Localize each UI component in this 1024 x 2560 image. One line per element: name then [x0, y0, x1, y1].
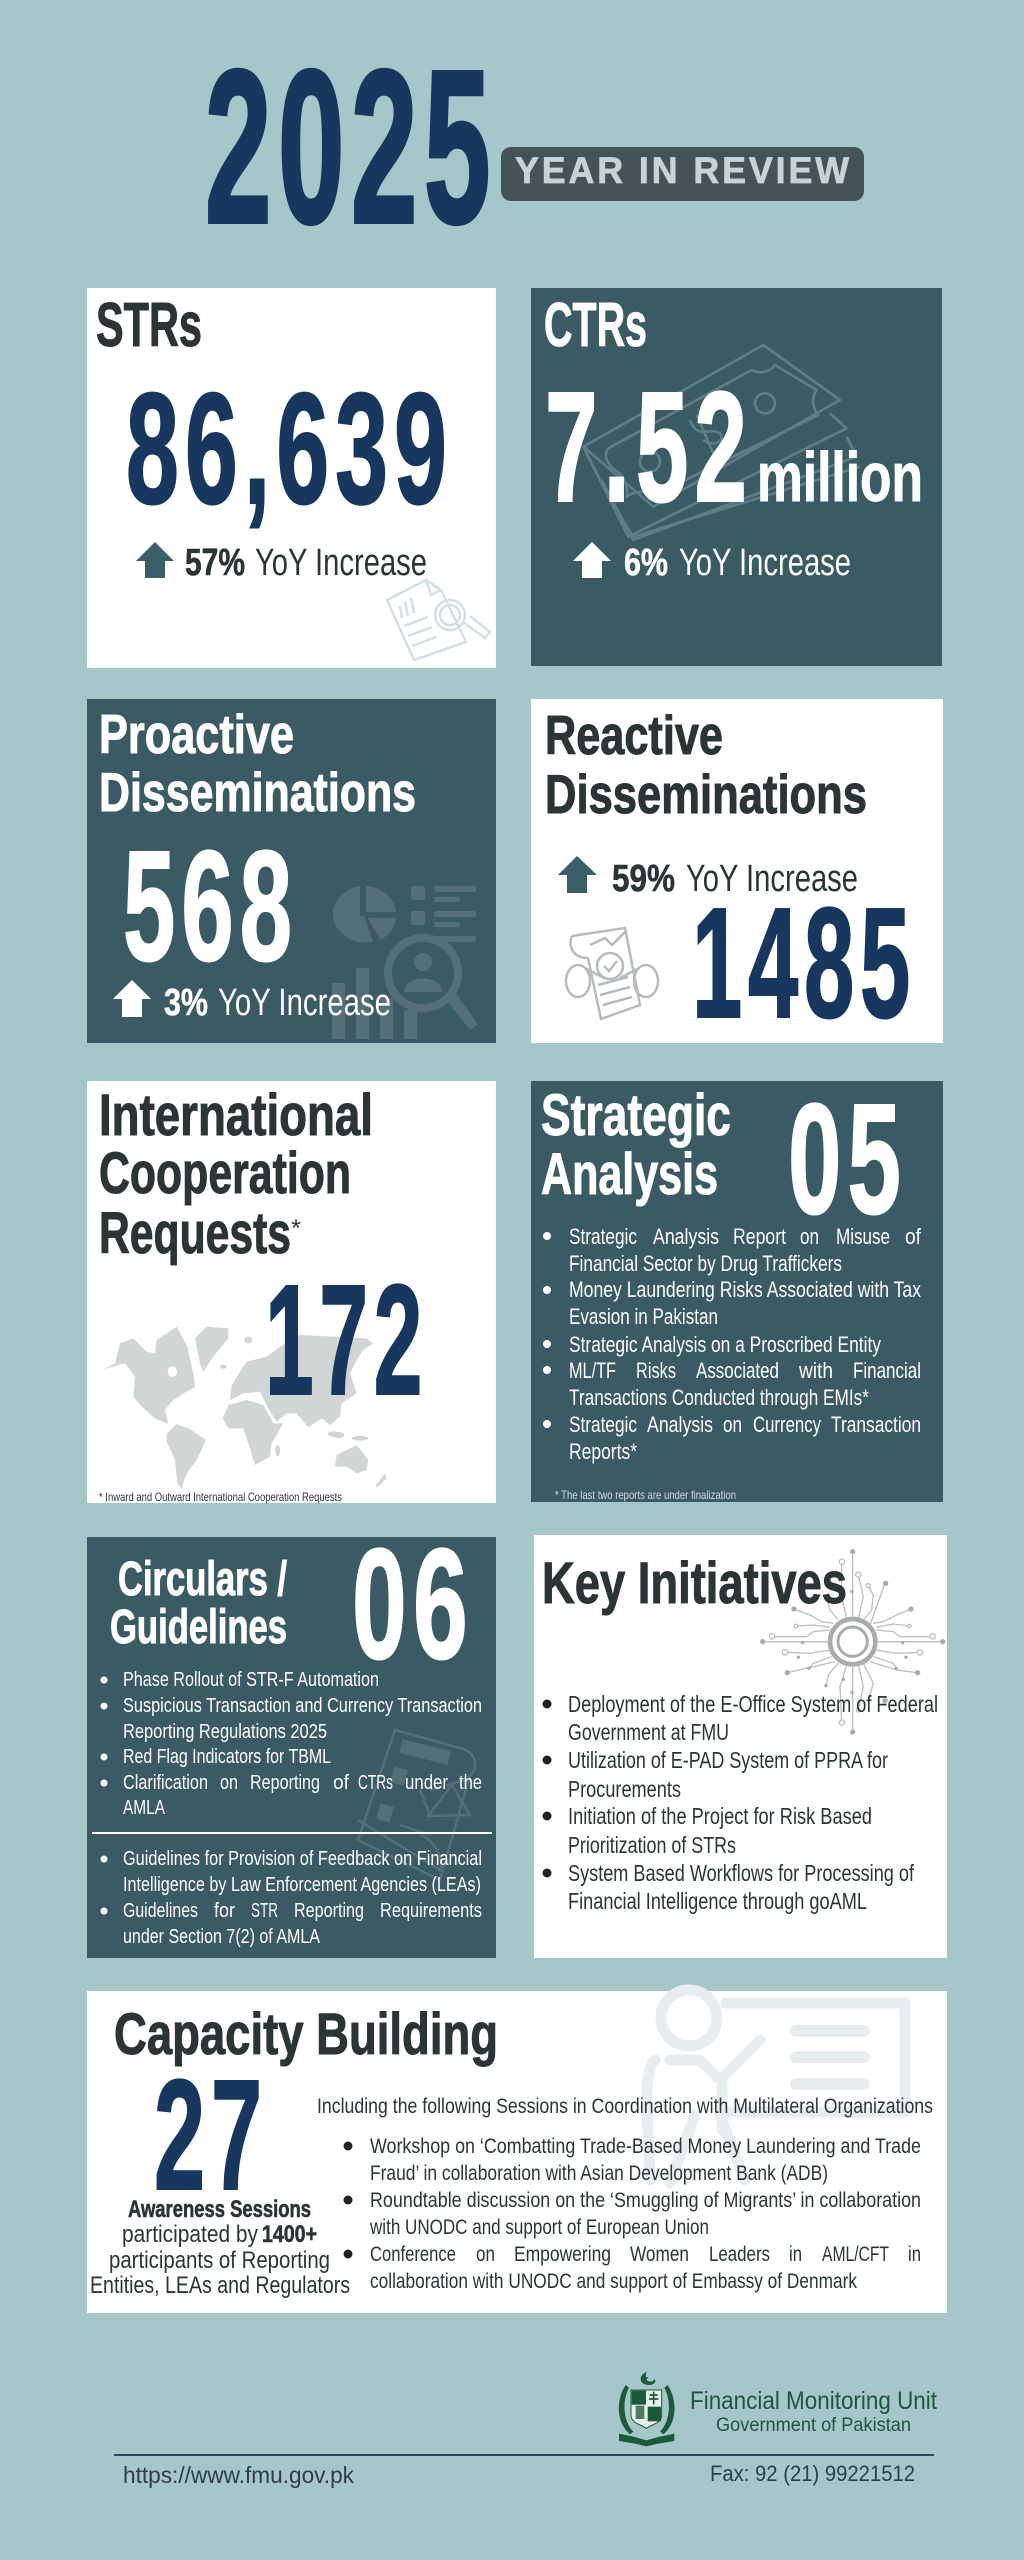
heading: Circulars / Guidelines: [110, 1553, 287, 1654]
YoY increase: [612, 858, 858, 900]
heading: Proactive Disseminations: Disseminations: [99, 761, 416, 823]
list: guidelines: under Section 7(2) of AMLA: [123, 1926, 321, 1948]
YoY increase: [164, 982, 391, 1024]
heading: Proactive Disseminations: Proactive: [99, 703, 294, 765]
list: strategic reports: ML/TF: [569, 1358, 616, 1383]
YoY increase: [185, 542, 427, 584]
heading: Strategic Analysis: Analysis: [541, 1142, 718, 1207]
list: strategic reports: Evasion in Pakistan: [569, 1304, 718, 1329]
heading: Circulars / Guidelines: Guidelines: [110, 1601, 287, 1654]
heading: International Cooperation Requests: *: [291, 1215, 301, 1242]
list: circulars: [100, 1669, 482, 1819]
heading: CTRs: CTRs: [544, 291, 647, 360]
list: strategic reports: Strategic: [569, 1224, 637, 1249]
number: 568: 568: [123, 819, 298, 994]
awareness sessions text: Entities, LEAs and Regulators: [90, 2272, 350, 2299]
list: strategic reports: Analysis: [653, 1224, 719, 1249]
list: strategic reports: [543, 1224, 922, 1464]
list: guidelines: Requirements: [380, 1900, 482, 1922]
list: strategic reports: Misuse: [836, 1224, 890, 1249]
organisation name: Financial Monitoring Unit: [690, 2387, 937, 2415]
list: sessions: with UNODC and support of European Union: [369, 2216, 709, 2239]
fax: Fax: 92 (21) 99221512: [710, 2461, 915, 2486]
panel: Circulars / Guidelines: [87, 1517, 496, 1958]
list: initiatives: Procurements: [568, 1776, 681, 1802]
list: sessions: Empowering: [514, 2243, 611, 2266]
list: sessions: Women: [630, 2243, 689, 2266]
number: 7.52 million: million: [757, 438, 923, 516]
icon: document with magnifier: [387, 580, 490, 660]
footnote: * Inward and Outward International Cooperation Requests: [99, 1490, 342, 1504]
heading: International Cooperation Requests: Requests: [99, 1201, 291, 1266]
list: strategic reports: Transaction: [831, 1412, 921, 1437]
list: strategic reports: Money Laundering Risks Associated with Tax: [569, 1277, 921, 1302]
list: strategic reports: of: [905, 1224, 922, 1249]
list: strategic reports: on: [800, 1224, 819, 1249]
YoY increase: 3%: [164, 982, 208, 1024]
list: strategic reports: Analysis: [647, 1412, 713, 1437]
heading: Proactive Disseminations: [99, 703, 416, 823]
YoY increase: [624, 542, 851, 584]
icon: handcuffs and report: [566, 928, 658, 1019]
list: strategic reports: Currency: [753, 1412, 821, 1437]
list: circulars: Clarification: [123, 1772, 208, 1794]
list: circulars: of: [333, 1772, 349, 1794]
list: circulars: Phase Rollout of STR-F Automation: [123, 1669, 379, 1691]
list: sessions: in: [789, 2243, 802, 2266]
list: sessions: Fraud’ in collaboration with Asian Development Bank (ADB): [370, 2162, 828, 2185]
list: circulars: on: [220, 1772, 238, 1794]
list: circulars: the: [459, 1772, 482, 1794]
list: strategic reports: Associated: [696, 1358, 779, 1383]
list: circulars: Suspicious Transaction and Currency Transaction: [123, 1695, 482, 1717]
awareness sessions text: participated by: [122, 2221, 258, 2248]
awareness sessions text: participants of Reporting: [109, 2247, 330, 2274]
list: guidelines: Reporting: [294, 1900, 364, 1922]
list: initiatives: [542, 1691, 938, 1914]
panel: Reactive Disseminations: [531, 699, 943, 1051]
heading: Reactive Disseminations: [545, 704, 867, 825]
YoY increase: YoY Increase: [218, 982, 391, 1024]
icon: up arrow: [558, 856, 597, 893]
list: sessions: in: [908, 2243, 921, 2266]
heading: Circulars / Guidelines: Circulars /: [118, 1553, 287, 1606]
title: [205, 26, 864, 269]
panel: CTRs: [531, 288, 942, 666]
list: initiatives: Financial Intelligence through goAML: [568, 1888, 867, 1914]
YoY increase: YoY Increase: [679, 542, 851, 584]
YoY increase: 57%: [185, 542, 245, 584]
list: sessions: collaboration with UNODC and support of Embassy of Denmark: [370, 2270, 857, 2293]
icon: analytics watermark: [332, 886, 478, 1039]
icon: world map: [103, 1327, 387, 1488]
icon: circuit: [760, 1549, 945, 1735]
number: 06: 06: [352, 1517, 474, 1692]
list: initiatives: Prioritization of STRs: [568, 1832, 736, 1858]
heading: Capacity Building: Capacity Building: [114, 2002, 498, 2067]
YoY increase: 6%: [624, 542, 668, 584]
list: guidelines: Guidelines: [123, 1900, 198, 1922]
heading: Key Initiatives: Key Initiatives: [542, 1551, 847, 1616]
panel: Strategic Analysis: [531, 1072, 943, 1502]
list: guidelines: Guidelines for Provision of Feedback on Financial: [123, 1848, 482, 1870]
list: initiatives: Initiation of the Project for Risk Based: [568, 1803, 872, 1829]
list: guidelines: for: [214, 1900, 235, 1922]
footer: [114, 2372, 937, 2488]
list: initiatives: Deployment of the E-Office System of Federal: [568, 1691, 938, 1717]
list: strategic reports: Report: [733, 1224, 786, 1249]
heading: Reactive Disseminations: Reactive: [545, 704, 723, 766]
list: sessions: AML/CFT: [822, 2243, 889, 2266]
heading: Strategic Analysis: [541, 1083, 731, 1207]
heading: STRs: STRs: [96, 291, 202, 360]
awareness sessions text: 1400+: [262, 2221, 317, 2248]
number: 7.52 million: 7.52: [545, 360, 753, 535]
number: 05: 05: [788, 1072, 907, 1247]
icon: scroll with warning: [358, 1730, 475, 1880]
YoY increase: YoY Increase: [686, 858, 858, 900]
list: circulars: Red Flag Indicators for TBML: [123, 1746, 331, 1768]
number: 172: 172: [265, 1253, 428, 1428]
list: circulars: under: [405, 1772, 448, 1794]
subtitle badge: YEAR IN REVIEW: [515, 150, 852, 191]
list: sessions: Workshop on ‘Combatting Trade-Based Money Laundering and Trade: [370, 2135, 921, 2158]
heading: International Cooperation Requests: Cooperation: [99, 1141, 351, 1206]
icon: up arrow: [113, 980, 151, 1017]
list: circulars: AMLA: [123, 1797, 166, 1819]
list: strategic reports: Financial Sector by Drug Traffickers: [569, 1251, 842, 1276]
list: sessions: on: [476, 2243, 495, 2266]
list: strategic reports: on: [723, 1412, 742, 1437]
YoY increase: 59%: [612, 858, 675, 900]
awareness sessions text: Awareness Sessions: [128, 2196, 311, 2223]
list: strategic reports: with: [798, 1358, 833, 1383]
heading: International Cooperation Requests: International: [99, 1083, 373, 1148]
panel: Capacity Building: [87, 1990, 947, 2313]
list: guidelines: STR: [251, 1900, 278, 1922]
list: guidelines: Intelligence by Law Enforcement Agencies (LEAs): [123, 1874, 481, 1896]
awareness sessions text: [90, 2196, 350, 2299]
heading: Strategic Analysis: Strategic: [541, 1083, 731, 1148]
footnote: * The last two reports are under finalization: [555, 1488, 736, 1502]
panel: STRs: [87, 288, 496, 668]
list: sessions: Conference: [370, 2243, 456, 2266]
title year: 2025: [205, 26, 497, 269]
list: guidelines: [100, 1848, 482, 1948]
icon: presenter at board: [647, 1990, 905, 2183]
organisation name: Government of Pakistan: [716, 2415, 911, 2436]
list: strategic reports: Risks: [636, 1358, 676, 1383]
list: circulars: CTRs: [358, 1772, 393, 1794]
icon: state emblem: [619, 2372, 675, 2446]
organisation name: [690, 2387, 937, 2436]
list: strategic reports: Transactions Conducted through EMIs*: [569, 1385, 869, 1410]
list: initiatives: Utilization of E-PAD System of PPRA for: [568, 1747, 888, 1773]
list: sessions: Leaders: [709, 2243, 770, 2266]
number: 27: 27: [154, 2048, 268, 2223]
panel: Proactive Disseminations: [87, 699, 496, 1043]
list: initiatives: System Based Workflows for Processing of: [568, 1860, 914, 1886]
list: sessions: Roundtable discussion on the ‘Smuggling of Migrants’ in collaboration: [370, 2189, 921, 2212]
icon: up arrow: [573, 542, 611, 578]
list: circulars: Reporting Regulations 2025: [123, 1721, 327, 1743]
number: 86,639: 86,639: [126, 361, 453, 537]
heading: Reactive Disseminations: Disseminations: [545, 763, 867, 825]
icon: up arrow: [136, 542, 174, 578]
panel: Key Initiatives: [534, 1535, 947, 1958]
list: strategic reports: Reports*: [569, 1439, 637, 1464]
panel: International Cooperation Requests: [87, 1081, 496, 1504]
list: strategic reports: Strategic Analysis on a Proscribed Entity: [569, 1332, 881, 1357]
list: initiatives: Government at FMU: [568, 1719, 729, 1745]
website: https://www.fmu.gov.pk: [123, 2462, 354, 2488]
list: circulars: Reporting: [250, 1772, 320, 1794]
list: strategic reports: Financial: [853, 1358, 921, 1383]
heading: International Cooperation Requests: [99, 1083, 373, 1266]
YoY increase: YoY Increase: [255, 542, 427, 584]
list: sessions: [344, 2135, 921, 2293]
icon: banknotes: [583, 345, 860, 540]
list: strategic reports: Strategic: [569, 1412, 637, 1437]
